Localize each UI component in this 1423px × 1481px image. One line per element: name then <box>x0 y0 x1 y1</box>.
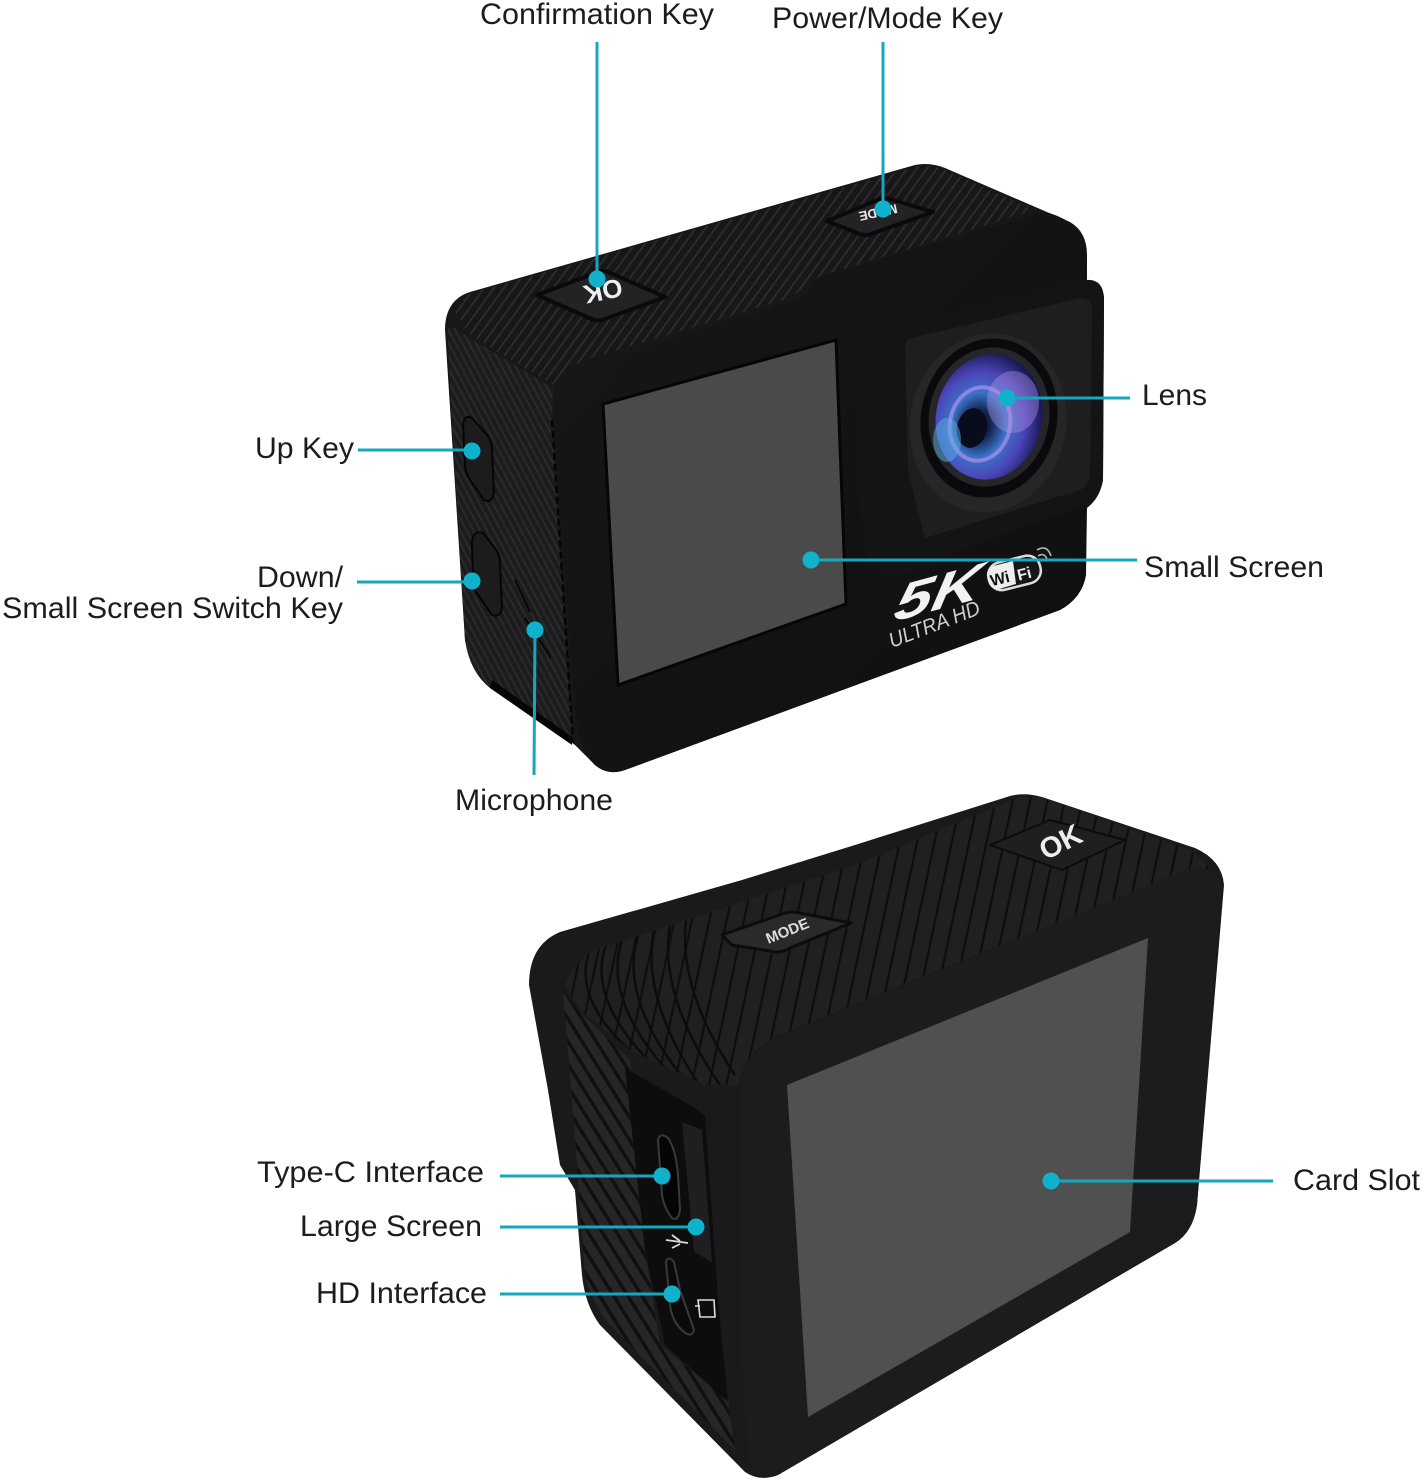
callout: Large Screen: Large Screen <box>300 1210 482 1243</box>
callout: Confirmation Key <box>480 0 714 288</box>
bottom slot <box>490 680 572 745</box>
type-c port <box>658 1135 680 1219</box>
camera body silhouette <box>529 794 1224 1478</box>
OK button: OK <box>581 272 625 310</box>
side face texture <box>447 327 572 740</box>
down key button <box>472 532 502 616</box>
left side texture <box>563 990 735 1450</box>
large screen <box>787 938 1148 1417</box>
OK button <box>537 271 665 320</box>
callout: Type-C Interface: Type-C Interface <box>257 1156 484 1189</box>
camera body silhouette <box>445 164 1104 772</box>
5K logo: Fi <box>1016 565 1033 585</box>
callout: Card Slot <box>1042 1164 1420 1197</box>
callout: Microphone <box>455 622 613 817</box>
callout: Power/Mode Key <box>772 2 1003 218</box>
callout: Down / Small Screen Switch Key <box>2 561 480 625</box>
up key button <box>463 417 494 501</box>
front face <box>553 212 1087 772</box>
callout: Lens: Lens <box>1142 379 1207 412</box>
USB symbol <box>666 1235 688 1248</box>
side seam <box>552 420 573 742</box>
callout: Microphone: Microphone <box>455 784 613 817</box>
panel: back camera view <box>529 780 1240 1478</box>
Mode button: MODE <box>857 201 899 224</box>
lens module <box>858 280 1104 577</box>
curved ribs <box>586 920 735 1092</box>
callout: HD Interface <box>316 1277 680 1310</box>
small screen <box>603 340 846 685</box>
callout: Power/Mode Key: Power/Mode Key <box>772 2 1003 35</box>
panel: front camera view <box>445 164 1104 772</box>
Mode button <box>827 198 933 235</box>
back face <box>740 868 1222 1477</box>
top face texture <box>571 797 1208 1085</box>
callout: Small Screen <box>802 551 1324 584</box>
lens glass <box>924 344 1054 490</box>
callout: Up Key <box>255 432 480 465</box>
callout: Small Screen: Small Screen <box>1144 551 1324 584</box>
callout: Lens <box>998 379 1207 412</box>
port panel <box>625 1068 728 1402</box>
5K logo: ULTRA HD <box>886 597 983 653</box>
microphone holes <box>515 580 551 658</box>
callout: Up Key: Up Key <box>255 432 354 465</box>
HD port <box>666 1258 694 1335</box>
top face texture <box>455 166 1035 385</box>
HDMI symbol <box>695 1300 715 1317</box>
5K logo: 5K <box>890 549 993 634</box>
callout: Down / Small Screen Switch Key: Down/ <box>257 561 344 594</box>
callout: Down / Small Screen Switch Key: Small Screen Switch Key <box>2 592 343 625</box>
5K logo <box>886 548 1051 653</box>
callout: Type-C Interface <box>257 1156 670 1189</box>
MODE button: MODE <box>764 915 812 948</box>
callout: Card Slot: Card Slot <box>1293 1164 1420 1197</box>
callout: Large Screen <box>300 1210 704 1243</box>
OK button <box>990 819 1125 870</box>
OK button: OK <box>1034 819 1088 867</box>
5K logo: Wi <box>989 569 1012 590</box>
MODE button <box>722 912 851 952</box>
callout: HD Interface: HD Interface <box>316 1277 487 1310</box>
